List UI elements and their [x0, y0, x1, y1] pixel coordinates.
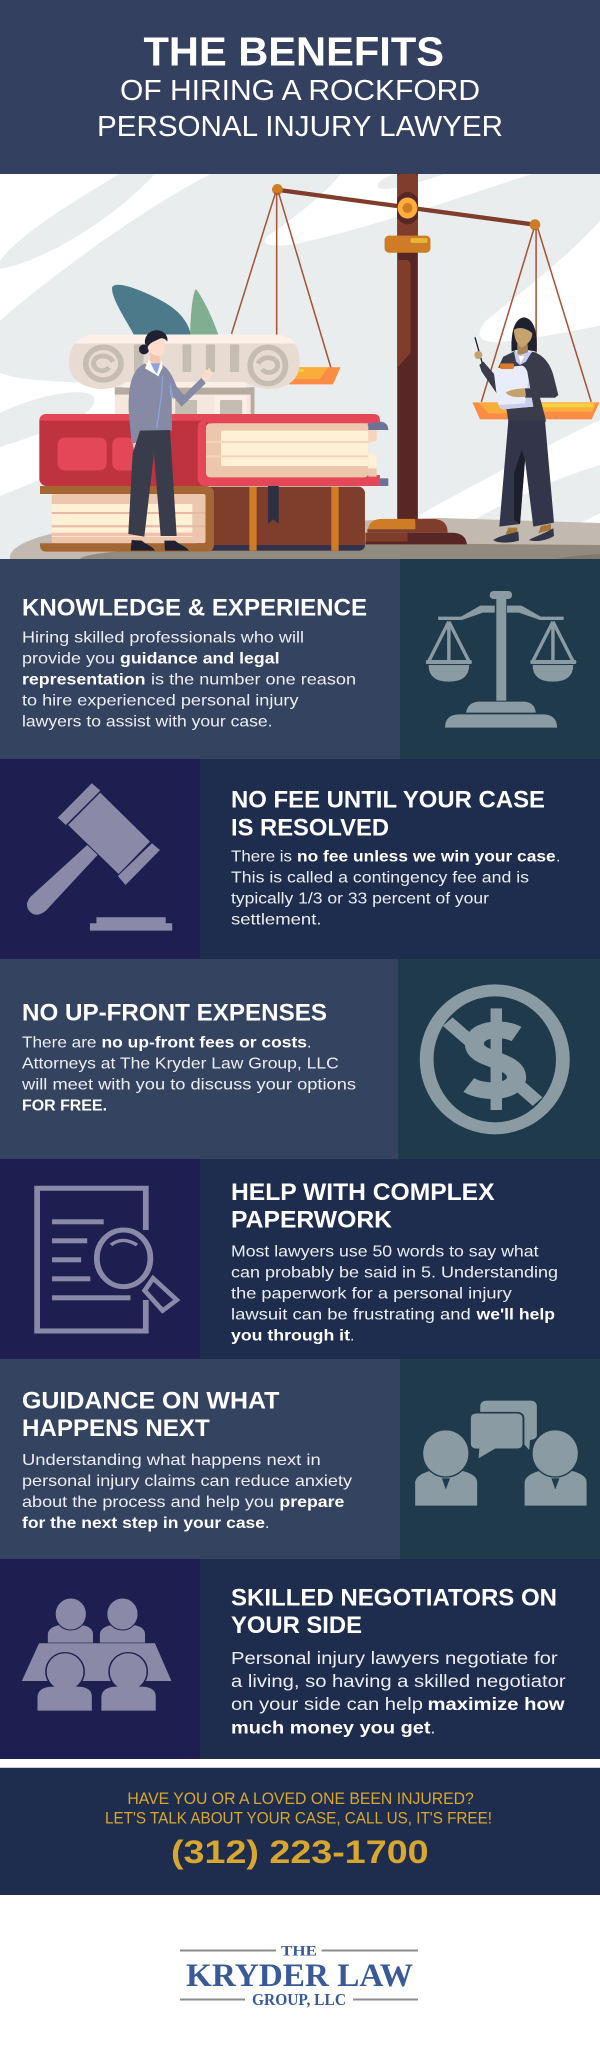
- body text: [231, 1244, 558, 1345]
- body text: no fee unless we win your case: [297, 849, 556, 866]
- body text: typically 1/3 or 33 percent of your: [231, 891, 490, 908]
- heading: [231, 1179, 494, 1234]
- body text: guidance and legal: [120, 650, 280, 667]
- panel: no up-front expenses: [0, 959, 600, 1159]
- header banner: [0, 0, 600, 174]
- body text: .: [556, 849, 560, 866]
- body text: [231, 1648, 566, 1737]
- body text: settlement.: [231, 912, 322, 929]
- heading: KNOWLEDGE & EXPERIENCE: [22, 595, 367, 622]
- body text: [231, 849, 560, 929]
- body text: .: [350, 1328, 354, 1345]
- illustration: lawyers, scales and books: [0, 174, 600, 559]
- icon: document and magnifier: [37, 1188, 177, 1331]
- body text: will meet with you to discuss your options: [21, 1077, 356, 1094]
- scale beam and pivot: [272, 184, 540, 253]
- scale strings: [232, 193, 591, 402]
- body text: prepare: [279, 1494, 345, 1511]
- left scale pan: [289, 367, 341, 384]
- plant leaves: [112, 285, 219, 336]
- logo: the kryder law group: THE: [281, 1943, 317, 1959]
- phone number: (312) 223-1700: [171, 1834, 429, 1870]
- body text: about the process and help you: [22, 1494, 274, 1511]
- panel: skilled negotiators: [0, 1559, 600, 1759]
- call to action text: [105, 1789, 492, 1827]
- right scale pan: [472, 402, 599, 419]
- body text: no up-front fees or costs: [102, 1035, 307, 1052]
- body text: on your side can help: [231, 1694, 423, 1714]
- scale base: [365, 519, 467, 544]
- body text: .: [307, 1035, 311, 1052]
- heading: HELP WITH COMPLEX: [231, 1179, 494, 1206]
- title: OF HIRING A ROCKFORD: [120, 75, 480, 107]
- logo: the kryder law group: GROUP, LLC: [252, 1990, 346, 2009]
- title: PERSONAL INJURY LAWYER: [97, 111, 503, 143]
- body text: you through it: [231, 1328, 351, 1345]
- call to action banner: [0, 1767, 600, 1895]
- body text: provide you: [22, 650, 115, 667]
- icon: no dollar sign: [427, 990, 563, 1128]
- body text: Most lawyers use 50 words to say what: [231, 1244, 539, 1261]
- body text: .: [265, 1515, 269, 1532]
- heading: NO UP-FRONT EXPENSES: [22, 999, 327, 1026]
- body text: lawyers to assist with your case.: [22, 713, 272, 730]
- icon: people at negotiating table: [22, 1598, 171, 1711]
- heading: PAPERWORK: [231, 1207, 393, 1234]
- heading: SKILLED NEGOTIATORS ON: [231, 1585, 557, 1612]
- body text: Attorneys at The Kryder Law Group, LLC: [22, 1056, 339, 1073]
- body text: can probably be said in 5. Understanding: [231, 1265, 558, 1282]
- panel: help with paperwork: [0, 1159, 600, 1359]
- icon: gavel: [27, 783, 172, 931]
- scale pole: [397, 174, 418, 523]
- heading: HAPPENS NEXT: [22, 1415, 210, 1442]
- body text: lawsuit can be frustrating and: [231, 1307, 471, 1324]
- heading: [231, 787, 545, 841]
- heading: YOUR SIDE: [231, 1612, 362, 1639]
- heading: [22, 1388, 280, 1442]
- logo: the kryder law group: [180, 1943, 418, 2009]
- heading: NO FEE UNTIL YOUR CASE: [231, 787, 545, 814]
- body text: This is called a contingency fee and is: [231, 870, 529, 887]
- icon: scales of justice: [426, 591, 576, 728]
- upper red book: [39, 414, 388, 486]
- right lawyer figure: [474, 317, 558, 543]
- ground: [10, 518, 600, 559]
- body text: a living, so having a skilled negotiator: [231, 1671, 566, 1691]
- icon: two people talking: [415, 1401, 587, 1506]
- panel: no fee until resolved: [0, 759, 600, 959]
- body text: much money you get: [231, 1717, 431, 1737]
- call to action text: HAVE YOU OR A LOVED ONE BEEN INJURED?: [127, 1789, 474, 1808]
- body text: There are: [22, 1035, 97, 1052]
- heading: [231, 1585, 557, 1639]
- body text: personal injury claims can reduce anxiety: [22, 1473, 352, 1490]
- body text: maximize how: [428, 1694, 565, 1714]
- body text: Hiring skilled professionals who will: [22, 629, 304, 646]
- body text: the paperwork for a personal injury: [231, 1286, 512, 1303]
- call to action text: LET'S TALK ABOUT YOUR CASE, CALL US, IT'S FREE!: [105, 1808, 492, 1827]
- heading: GUIDANCE ON WHAT: [22, 1388, 280, 1415]
- body text: [21, 1035, 356, 1115]
- ionic column: [69, 335, 300, 416]
- heading: IS RESOLVED: [231, 814, 389, 841]
- panel: guidance on what happens next: [0, 1359, 600, 1559]
- body text: Personal injury lawyers negotiate for: [231, 1648, 558, 1668]
- title: THE BENEFITS: [144, 28, 444, 74]
- body text: Understanding what happens next in: [22, 1452, 321, 1469]
- panel: knowledge and experience: [0, 559, 600, 759]
- body text: we'll help: [475, 1307, 555, 1324]
- body text: FOR FREE.: [22, 1098, 107, 1115]
- logo: the kryder law group: KRYDER LAW: [186, 1958, 413, 1994]
- body text: .: [430, 1717, 435, 1737]
- left lawyer figure: [128, 330, 212, 551]
- body text: is the number one reason: [151, 671, 356, 688]
- body text: [22, 1452, 352, 1532]
- body text: representation: [22, 671, 146, 688]
- body text: [22, 629, 356, 730]
- body text: There is: [231, 849, 292, 866]
- title: [97, 28, 503, 143]
- body text: for the next step in your case: [22, 1515, 265, 1532]
- body text: to hire experienced personal injury: [22, 692, 298, 709]
- lower brown book: [40, 486, 365, 552]
